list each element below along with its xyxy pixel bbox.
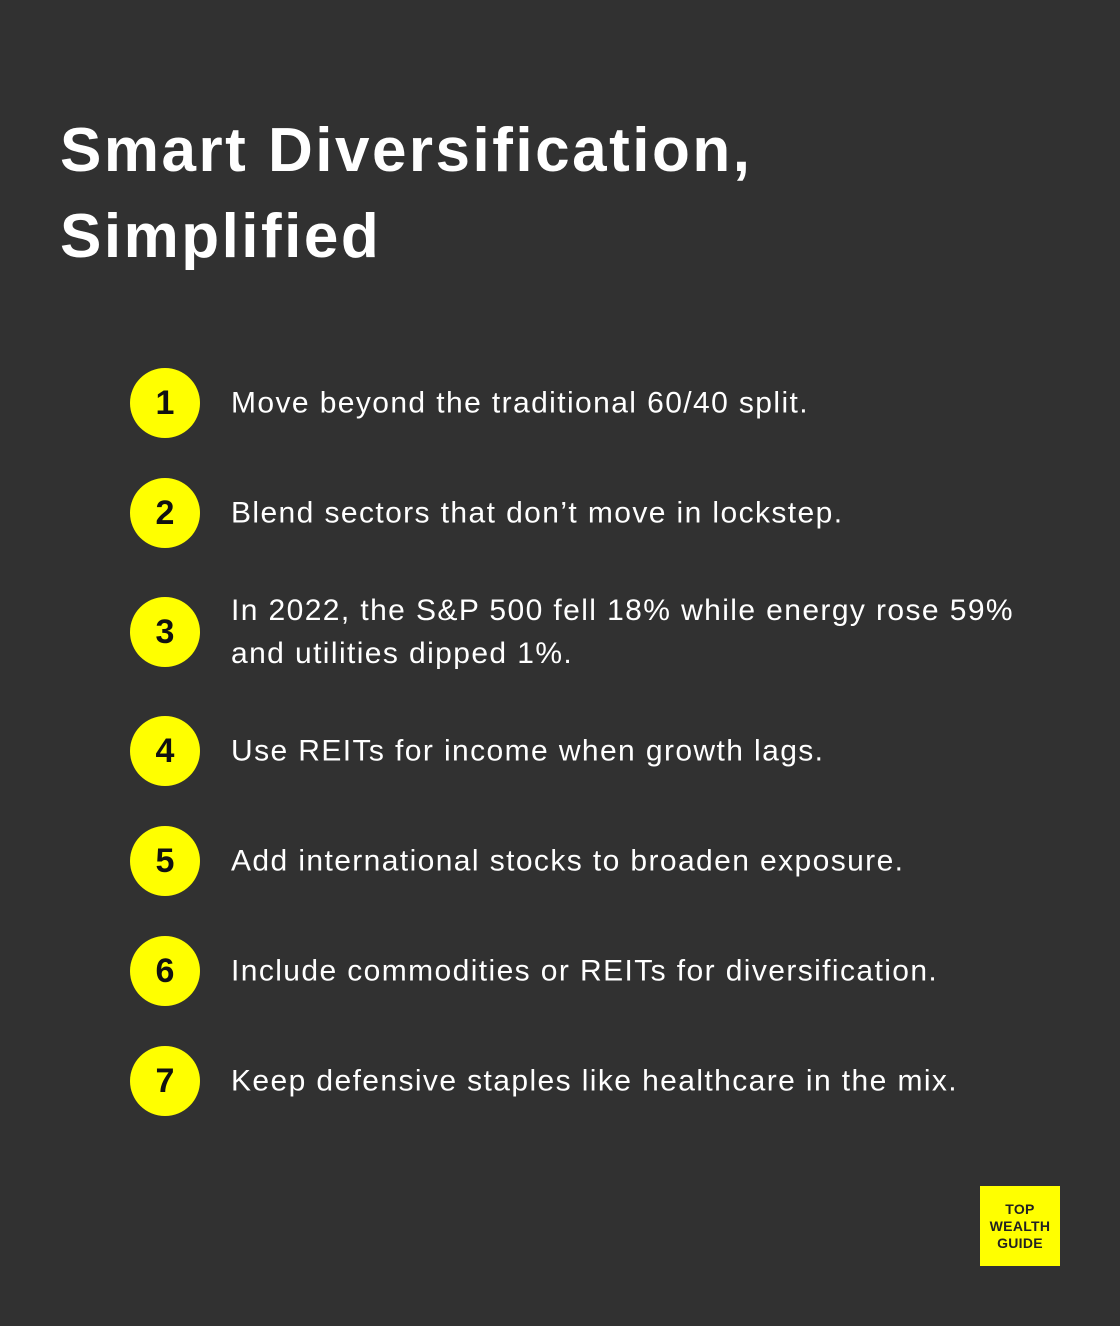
logo: WEALTH [990,1218,1050,1234]
item 1 [130,368,809,438]
item 4: 4 [156,732,174,770]
item 4 [130,716,824,786]
item 7: 7 [156,1062,174,1100]
item 1: Move beyond the traditional 60/40 split. [231,386,809,420]
item 2: 2 [156,494,174,532]
item 3: 3 [156,613,174,651]
item 2 [130,478,843,548]
logo [980,1186,1060,1266]
title: Simplified [60,202,381,271]
title [60,116,752,271]
item 3: In 2022, the S&P 500 fell 18% while energy rose 59% [231,594,1014,627]
item 7 [130,1046,958,1116]
item 6: Include commodities or REITs for diversification. [231,954,938,988]
logo: TOP [1005,1200,1035,1216]
item 3: and utilities dipped 1%. [231,637,573,670]
item 3 [130,594,1014,670]
item 4: Use REITs for income when growth lags. [231,734,824,768]
item 7: Keep defensive staples like healthcare in the mix. [231,1064,958,1098]
item 5 [130,826,904,896]
item 6: 6 [156,952,174,990]
item 5: Add international stocks to broaden exposure. [231,844,904,878]
item 2: Blend sectors that don’t move in lockstep. [231,496,843,530]
item 6 [130,936,938,1006]
title: Smart Diversification, [60,116,752,185]
item 5: 5 [156,842,174,880]
logo: GUIDE [997,1234,1043,1250]
item 1: 1 [156,384,174,422]
